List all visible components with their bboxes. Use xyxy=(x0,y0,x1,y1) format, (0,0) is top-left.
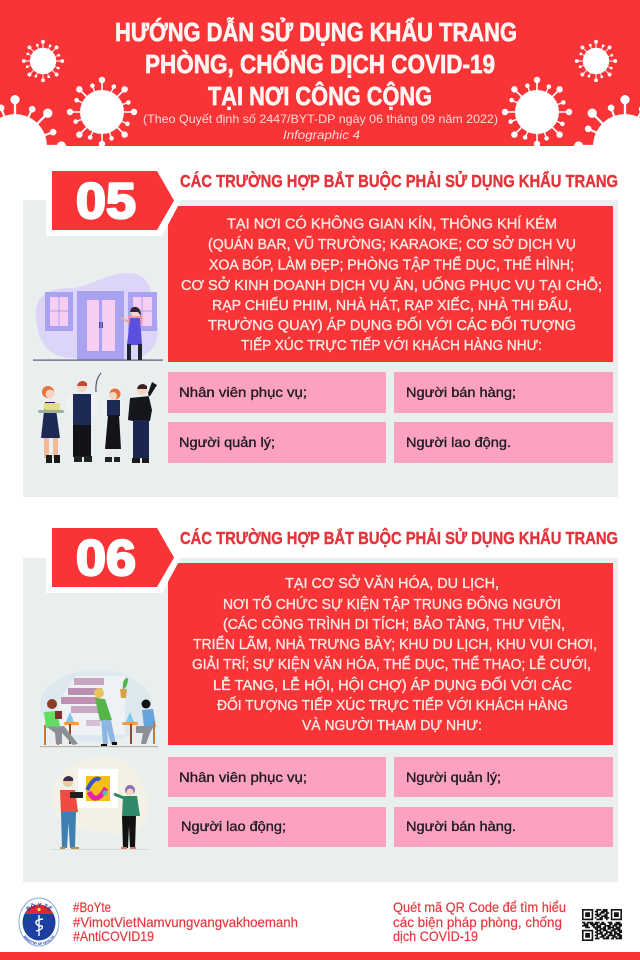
red text box 06: LỄ TANG, LỄ HỘI, HỘI CHỢ) ÁP DỤNG ĐỐI VỚI CÁC xyxy=(213,676,572,694)
list: audience options 06: Người bán hàng. xyxy=(406,818,516,834)
list: audience options 05 xyxy=(168,372,613,463)
QR call to action: Quét mã QR Code để tìm hiểu xyxy=(393,899,566,915)
panel: section 06 xyxy=(23,522,618,882)
subtitle xyxy=(143,112,498,142)
illustration: four masked staff xyxy=(38,373,157,463)
list: audience options 05: Người quản lý; xyxy=(179,434,275,450)
bottom red bar xyxy=(0,952,640,960)
red text box 06: ĐỐI TƯỢNG TIẾP XÚC TRỰC TIẾP VỚI KHÁCH HÀNG xyxy=(217,696,568,714)
illustration: library readers xyxy=(40,670,158,747)
red text box 06: NƠI TỔ CHỨC SỰ KIỆN TẬP TRUNG ĐÔNG NGƯỜI xyxy=(223,595,561,613)
red text box 05: XOA BÓP, LÀM ĐẸP; PHÒNG TẬP THỂ DỤC, THỂ HÌNH; xyxy=(209,256,574,274)
list: audience options 05: Nhân viên phục vụ; xyxy=(179,384,307,400)
title: PHÒNG, CHỐNG DỊCH COVID-19 xyxy=(145,49,495,79)
red text box 05 xyxy=(168,206,613,362)
number badge 06: 06 xyxy=(76,530,136,586)
header banner xyxy=(0,0,640,197)
hashtags: #AntiCOVID19 xyxy=(73,928,154,944)
icon: Ministry of Health logo: BỘ Y TẾ xyxy=(26,902,53,912)
subtitle: (Theo Quyết định số 2447/BYT-DP ngày 06 tháng 09 năm 2022) xyxy=(143,112,498,126)
title: HƯỚNG DẪN SỬ DỤNG KHẨU TRANG xyxy=(115,16,517,47)
red text box 05: TRƯỜNG QUAY) ÁP DỤNG ĐỐI VỚI CÁC ĐỐI TƯỢNG xyxy=(208,316,576,334)
red text box 05: (QUÁN BAR, VŨ TRƯỜNG; KARAOKE; CƠ SỞ DỊCH VỤ xyxy=(208,235,576,253)
number badge 05 xyxy=(46,165,181,236)
list: audience options 06: Nhân viên phục vụ; xyxy=(179,769,307,785)
illustration: storefront with masked woman xyxy=(33,273,163,361)
list: audience options 06: Người lao động; xyxy=(181,818,286,834)
number badge 05: 05 xyxy=(76,173,136,229)
red text box 06: (CÁC CÔNG TRÌNH DI TÍCH; BẢO TÀNG, THƯ VIỆN, xyxy=(223,616,565,633)
footer xyxy=(0,898,640,960)
QR call to action: các biện pháp phòng, chống xyxy=(393,914,562,930)
red text box 05: TIẾP XÚC TRỰC TIẾP VỚI KHÁCH HÀNG NHƯ: xyxy=(241,337,542,354)
red text box 05: CƠ SỞ KINH DOANH DỊCH VỤ ĂN, UỐNG PHỤC VỤ TẠI CHỖ; xyxy=(181,276,602,294)
icon: Ministry of Health logo: MINISTRY OF HEALTH xyxy=(24,935,54,945)
illustration: gallery visitors xyxy=(50,757,150,850)
QR call to action: dịch COVID-19 xyxy=(393,928,478,944)
icon: QR code xyxy=(582,909,622,941)
panel: section 05 xyxy=(23,165,618,497)
hashtags: #VimotVietNamvungvangvakhoemanh xyxy=(73,914,298,930)
red text box 05: TẠI NƠI CÓ KHÔNG GIAN KÍN, THÔNG KHÍ KÉM xyxy=(227,216,557,232)
list: audience options 06 xyxy=(168,757,613,847)
list: audience options 05: Người bán hàng; xyxy=(406,384,516,400)
red text box 06: GIẢI TRÍ; SỰ KIỆN VĂN HÓA, THỂ DỤC, THỂ THAO; LỄ CƯỚI, xyxy=(192,655,591,673)
hashtags xyxy=(73,899,298,944)
red text box 06: TRIỂN LÃM, NHÀ TRƯNG BÀY; KHU DU LỊCH, KHU VUI CHƠI, xyxy=(193,635,597,653)
virus decorations xyxy=(0,40,640,197)
hashtags: #BoYte xyxy=(73,899,111,915)
title: TẠI NƠI CÔNG CỘNG xyxy=(208,81,432,111)
red text box 05: RẠP CHIẾU PHIM, NHÀ HÁT, RẠP XIẾC, NHÀ THI ĐẤU, xyxy=(212,297,572,314)
number badge 06 xyxy=(46,522,181,593)
QR call to action xyxy=(393,899,566,944)
list: audience options 06: Người quản lý; xyxy=(406,769,501,785)
red text box 06: TẠI CƠ SỞ VĂN HÓA, DU LỊCH, xyxy=(285,574,499,592)
red text box 06 xyxy=(168,563,613,745)
icon: Ministry of Health logo xyxy=(18,898,60,946)
subtitle: Infographic 4 xyxy=(283,128,360,142)
title xyxy=(115,16,517,111)
list: audience options 05: Người lao động. xyxy=(406,434,511,450)
red text box 06: VÀ NGƯỜI THAM DỰ NHƯ: xyxy=(302,717,482,734)
